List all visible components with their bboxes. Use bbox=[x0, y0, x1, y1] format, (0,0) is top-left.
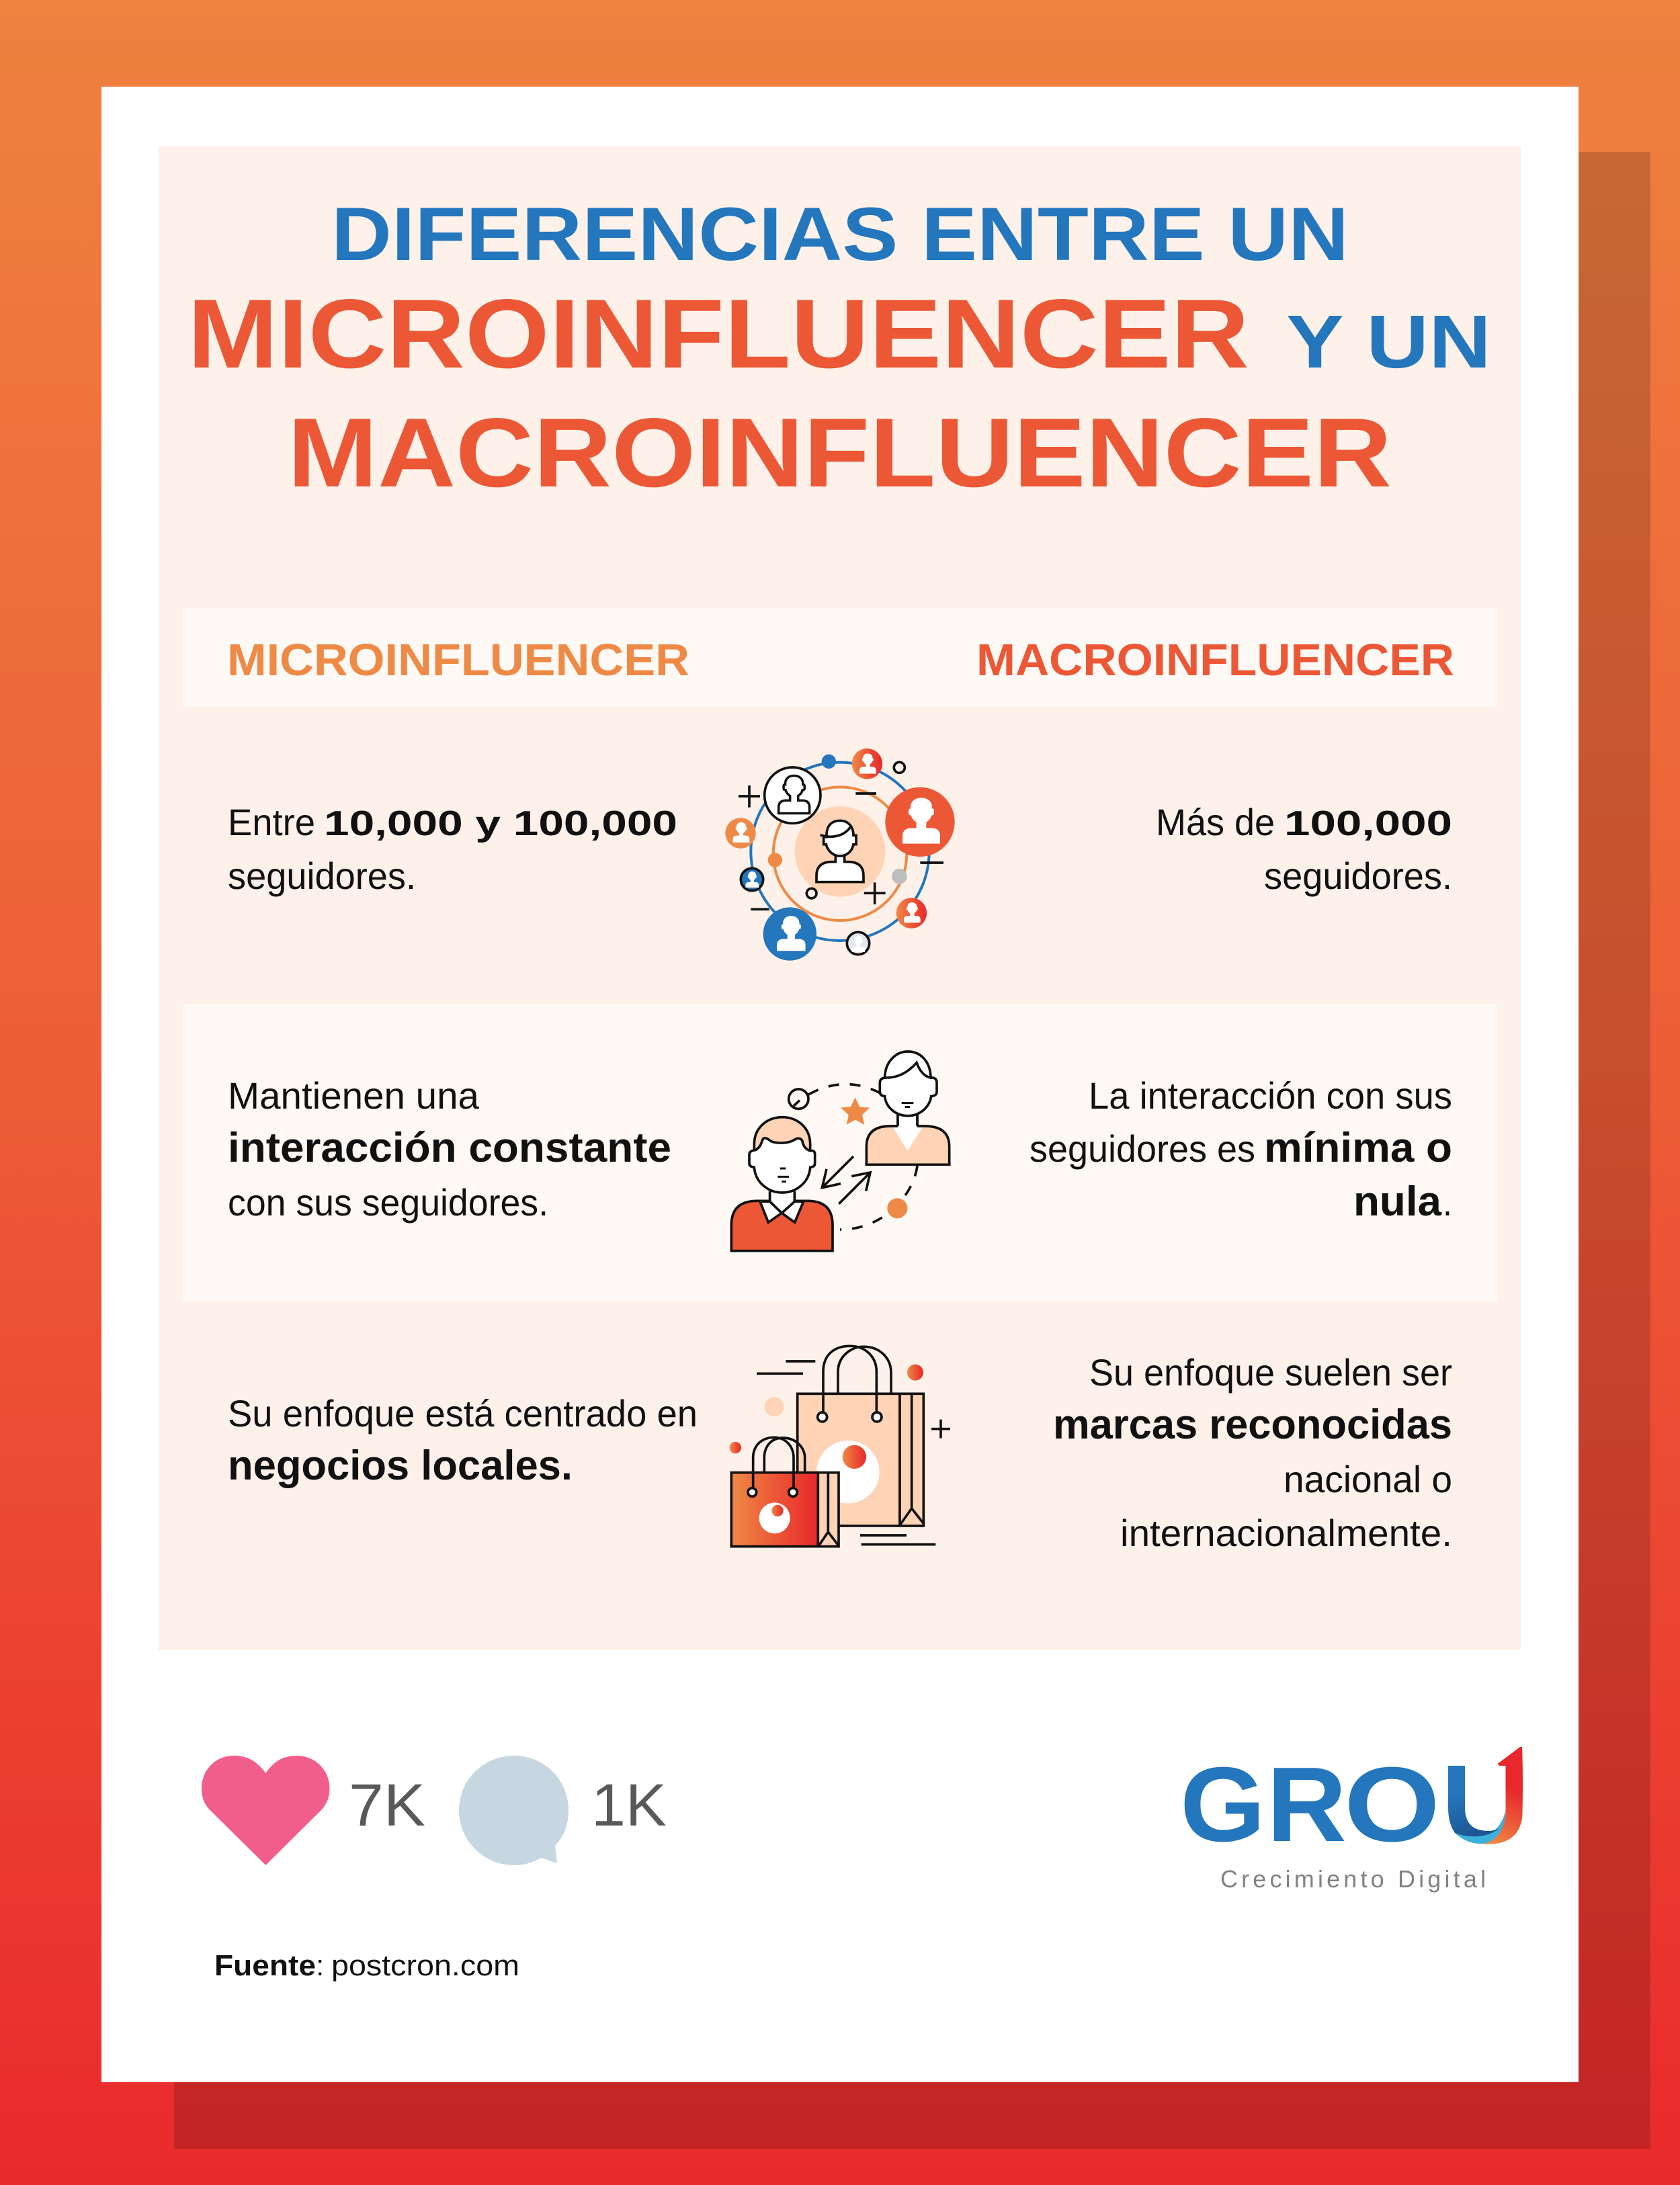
likes count: 7K bbox=[349, 1771, 425, 1838]
row 3 left text: Su enfoque está centrado en bbox=[228, 1392, 698, 1434]
row 2 right text: . bbox=[1443, 1181, 1452, 1224]
row 3 right text: Su enfoque suelen ser bbox=[1089, 1351, 1452, 1394]
row 2 background strip bbox=[183, 1004, 1497, 1301]
icon: shopping bags bbox=[730, 1346, 950, 1547]
column heading: macroinfluencer: MACROINFLUENCER bbox=[976, 635, 1454, 685]
row 3 right text bbox=[1053, 1351, 1452, 1554]
row 3 right text: marcas reconocidas bbox=[1053, 1402, 1452, 1448]
row 2 right text bbox=[1030, 1074, 1452, 1225]
logo tagline: Crecimiento Digital bbox=[1220, 1865, 1486, 1893]
small bag bbox=[731, 1437, 839, 1547]
panel: comparison background bbox=[159, 146, 1521, 1650]
logo: GROU: G bbox=[1180, 1746, 1265, 1864]
logo mark: arrow shaped U bbox=[1448, 1747, 1523, 1844]
row 2 left text bbox=[228, 1074, 671, 1224]
column heading: microinfluencer: MICROINFLUENCER bbox=[227, 635, 689, 685]
title line 1: DIFERENCIAS ENTRE UN bbox=[331, 192, 1349, 276]
row 1 right text: 100,000 bbox=[1284, 804, 1452, 843]
source credit: : bbox=[316, 1949, 324, 1982]
row 1 left text bbox=[228, 801, 677, 897]
source credit: Fuente bbox=[214, 1949, 316, 1982]
source credit bbox=[214, 1949, 519, 1982]
row 1 right text: seguidores. bbox=[1264, 855, 1452, 897]
row 3 left text bbox=[228, 1392, 698, 1489]
icon: comment bubble bbox=[459, 1756, 569, 1865]
title line 3: MACROINFLUENCER bbox=[288, 398, 1392, 507]
person: woman on the right bbox=[866, 1052, 950, 1164]
logo: GROU: R bbox=[1267, 1746, 1347, 1864]
source credit: postcron.com bbox=[331, 1949, 519, 1982]
row 2 left text: Mantienen una bbox=[228, 1074, 480, 1117]
row 2 left text: interacción constante bbox=[228, 1125, 671, 1171]
row 3 right text: nacional o bbox=[1284, 1458, 1452, 1500]
row 1 right text bbox=[1156, 801, 1452, 897]
row 1 left text: Entre bbox=[228, 801, 315, 843]
row 2 right text: seguidores es bbox=[1030, 1127, 1255, 1170]
icon: two people interacting bbox=[731, 1052, 950, 1251]
comments count: 1K bbox=[591, 1771, 667, 1838]
row 3 right text: internacionalmente. bbox=[1120, 1512, 1452, 1554]
icon: heart likes bbox=[202, 1756, 329, 1865]
row 3 left text: negocios locales. bbox=[228, 1443, 573, 1489]
logo: GROU: O bbox=[1344, 1746, 1440, 1864]
row 1 left text: seguidores. bbox=[228, 855, 416, 897]
row 1 right text: Más de bbox=[1156, 801, 1275, 843]
large bag bbox=[798, 1346, 924, 1526]
title connector: Y UN bbox=[1286, 300, 1491, 384]
title line 2: MICROINFLUENCER bbox=[187, 279, 1249, 388]
row 2 right text: nula bbox=[1353, 1179, 1442, 1225]
row 2 right text: La interacción con sus bbox=[1089, 1074, 1452, 1117]
person: man on the left bbox=[731, 1117, 833, 1251]
icon: network of followers bbox=[725, 748, 955, 961]
row 2 right text: mínima o bbox=[1264, 1125, 1452, 1171]
row 1 left text: 10,000 y 100,000 bbox=[324, 804, 677, 843]
column header strip bbox=[183, 608, 1497, 707]
logo: GROU bbox=[1180, 1746, 1523, 1893]
row 2 left text: con sus seguidores. bbox=[228, 1181, 548, 1224]
title bbox=[187, 192, 1491, 507]
